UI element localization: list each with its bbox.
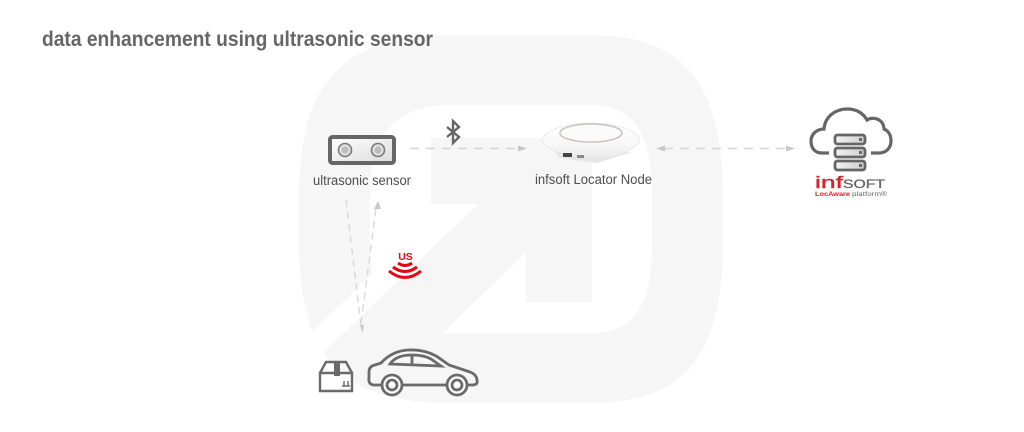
icon: US signal waves: US xyxy=(398,251,413,263)
logo: infsoft LocAware platform: inf xyxy=(815,173,843,192)
icon: ultrasonic sensor xyxy=(330,137,394,163)
icon: package box xyxy=(320,361,352,391)
title: data enhancement using ultrasonic sensor xyxy=(42,28,433,51)
icon: car xyxy=(369,350,477,395)
logo: infsoft LocAware platform: platform® xyxy=(852,190,887,198)
label: ultrasonic sensor: ultrasonic sensor xyxy=(313,173,411,188)
arrow: ultrasonic signal up xyxy=(361,201,381,323)
logo: infsoft LocAware platform: LocAware xyxy=(815,191,850,198)
arrow: ultrasonic signal down xyxy=(346,200,364,333)
icon: US signal waves xyxy=(389,251,421,278)
arrow: locator node to cloud xyxy=(656,146,795,152)
logo: infsoft LocAware platform xyxy=(815,173,887,198)
icon: infsoft locator node xyxy=(542,123,640,163)
icon: bluetooth xyxy=(447,121,459,143)
arrow: sensor to locator node xyxy=(410,146,527,152)
icon: cloud with servers xyxy=(811,109,891,170)
logo: infsoft LocAware platform: SOFT xyxy=(843,179,885,191)
background logo watermark xyxy=(299,35,723,403)
label: infsoft locator node: infsoft Locator Node xyxy=(535,172,652,187)
